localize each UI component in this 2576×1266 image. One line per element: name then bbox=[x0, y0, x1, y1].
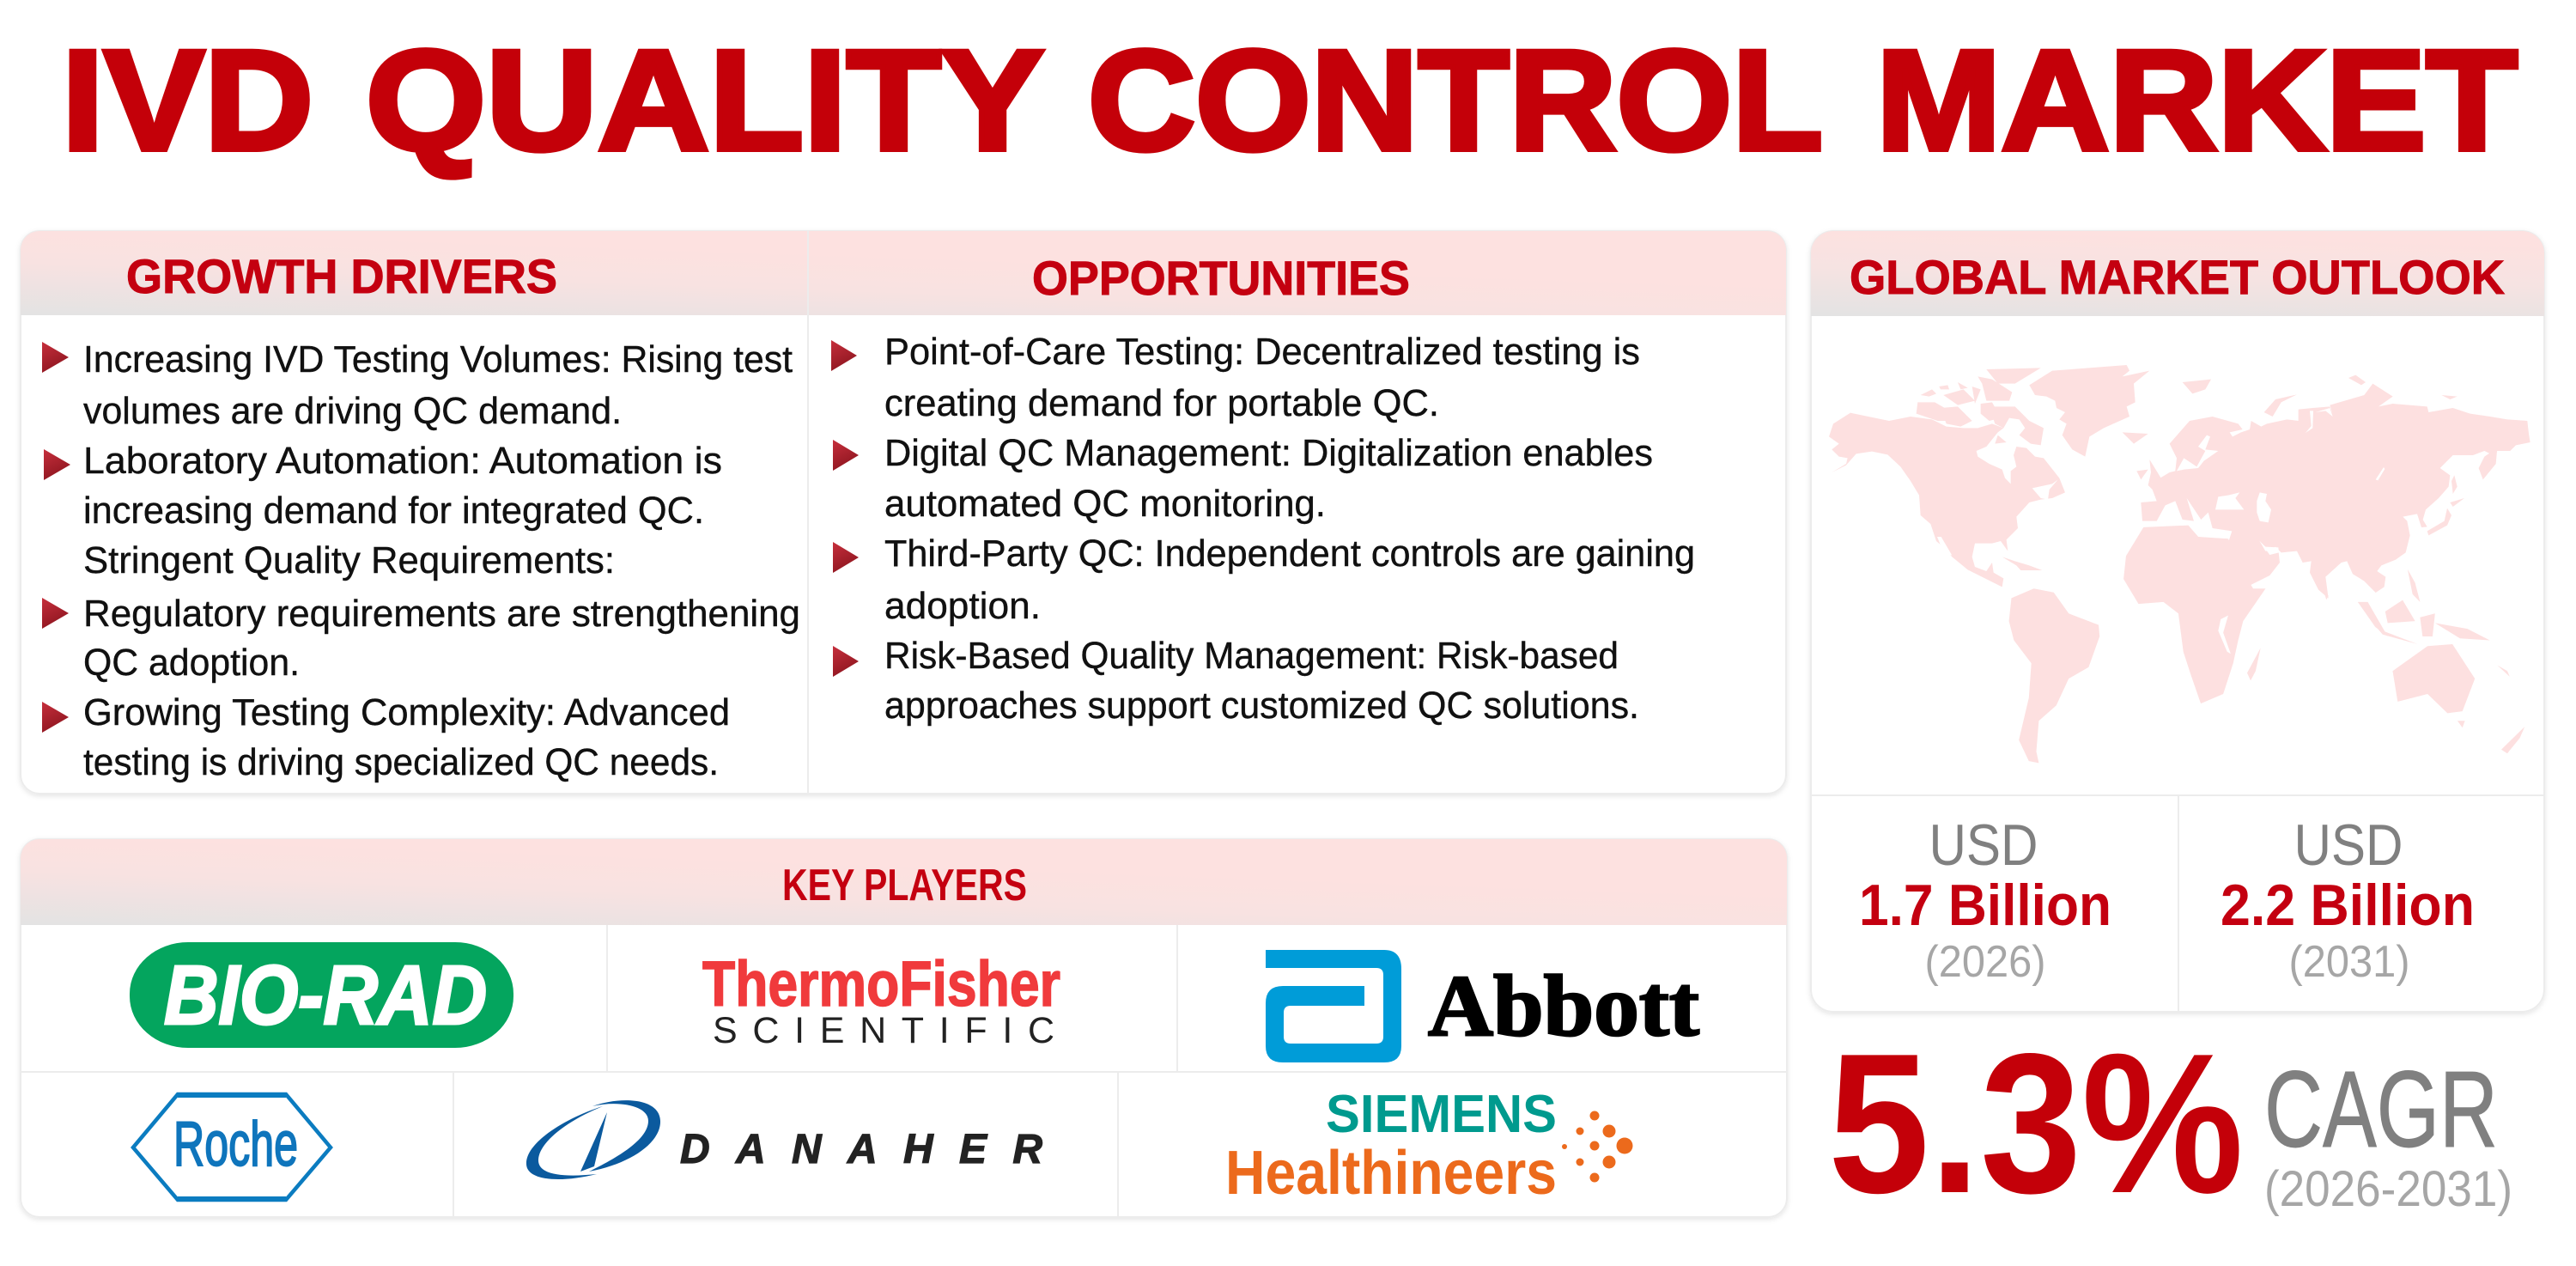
list: growth drivers: volumes are driving QC demand. bbox=[83, 390, 622, 432]
value: 2026: USD bbox=[1929, 813, 2038, 878]
value: 2031: 2.2 Billion bbox=[2221, 873, 2475, 938]
logo: Siemens Healthineers bbox=[1225, 1085, 1633, 1208]
list: opportunities: Third-Party QC: Independent controls are gaining bbox=[884, 533, 1695, 575]
heading: growth drivers: GROWTH DRIVERS bbox=[126, 249, 557, 303]
logo: Danaher bbox=[526, 1100, 1042, 1179]
title: CONTROL bbox=[1088, 21, 1823, 180]
logo: Thermo Fisher Scientific bbox=[702, 948, 1060, 1051]
logo: Abbott bbox=[1266, 950, 1699, 1062]
logo: Thermo Fisher Scientific: ThermoFisher bbox=[702, 948, 1060, 1019]
list: opportunities: adoption. bbox=[884, 585, 1041, 627]
title: QUALITY bbox=[366, 21, 1044, 180]
logo: Abbott: Abbott bbox=[1428, 958, 1699, 1055]
list: growth drivers: testing is driving specialized QC needs. bbox=[83, 741, 719, 783]
list: growth drivers: Laboratory Automation: Automation is bbox=[83, 440, 722, 482]
cagr label: (2026-2031) bbox=[2264, 1161, 2512, 1217]
cagr value: 5.3% bbox=[1828, 1013, 2244, 1235]
south america, africa, oceania bbox=[2009, 526, 2524, 763]
panel: key players bbox=[21, 839, 1787, 1217]
list: opportunities: Point-of-Care Testing: Decentralized testing is bbox=[884, 331, 1640, 373]
cagr label bbox=[2264, 1049, 2512, 1217]
logo: Bio-Rad: BIO-RAD bbox=[164, 948, 487, 1042]
list: growth drivers: Regulatory requirements are strengthening bbox=[83, 593, 800, 635]
logo: Danaher: DANAHER bbox=[680, 1127, 1042, 1172]
value: 2031: (2031) bbox=[2289, 937, 2409, 987]
list: growth drivers: Increasing IVD Testing Volumes: Rising test bbox=[83, 338, 793, 380]
title: IVD bbox=[62, 21, 313, 180]
cagr label: CAGR bbox=[2264, 1049, 2498, 1170]
value: 2026: 1.7 Billion bbox=[1859, 873, 2111, 938]
list: opportunities: creating demand for portable QC. bbox=[884, 382, 1439, 424]
value: 2031: USD bbox=[2294, 813, 2403, 878]
value: 2031 bbox=[2221, 813, 2475, 987]
heading: global market outlook: GLOBAL MARKET OUTLOOK bbox=[1850, 250, 2505, 304]
list: growth drivers bbox=[42, 338, 800, 783]
list: opportunities: Digital QC Management: Digitalization enables bbox=[884, 432, 1653, 474]
list: growth drivers: increasing demand for integrated QC. bbox=[83, 490, 704, 532]
panel: growth drivers and opportunities bbox=[21, 231, 1786, 794]
heading: key players: KEY PLAYERS bbox=[782, 861, 1027, 910]
title: MARKET bbox=[1876, 21, 2518, 180]
logo: Siemens Healthineers: SIEMENS bbox=[1326, 1085, 1557, 1144]
logo: Siemens Healthineers: Healthineers bbox=[1225, 1139, 1557, 1208]
world map bbox=[1825, 365, 2530, 763]
heading: opportunities: OPPORTUNITIES bbox=[1032, 251, 1410, 305]
panel: global market outlook bbox=[1811, 231, 2544, 1012]
eurasia bbox=[2141, 375, 2530, 600]
value: 2026 bbox=[1859, 813, 2111, 987]
value: 2026: (2026) bbox=[1925, 937, 2045, 987]
list: growth drivers: Stringent Quality Requirements: bbox=[83, 539, 615, 581]
list: growth drivers: Growing Testing Complexity: Advanced bbox=[83, 691, 730, 733]
north america and greenland bbox=[1825, 365, 2161, 587]
title bbox=[62, 21, 2518, 180]
list: opportunities: automated QC monitoring. bbox=[884, 483, 1326, 525]
logo: Thermo Fisher Scientific: SCIENTIFIC bbox=[713, 1010, 1054, 1051]
list: opportunities: Risk-Based Quality Management: Risk-based bbox=[884, 635, 1619, 677]
list: opportunities: approaches support customized QC solutions. bbox=[884, 685, 1639, 727]
logo: Roche: Roche bbox=[173, 1110, 298, 1179]
logo: Roche bbox=[133, 1093, 331, 1202]
list: opportunities bbox=[831, 331, 1695, 727]
list: growth drivers: QC adoption. bbox=[83, 642, 300, 684]
